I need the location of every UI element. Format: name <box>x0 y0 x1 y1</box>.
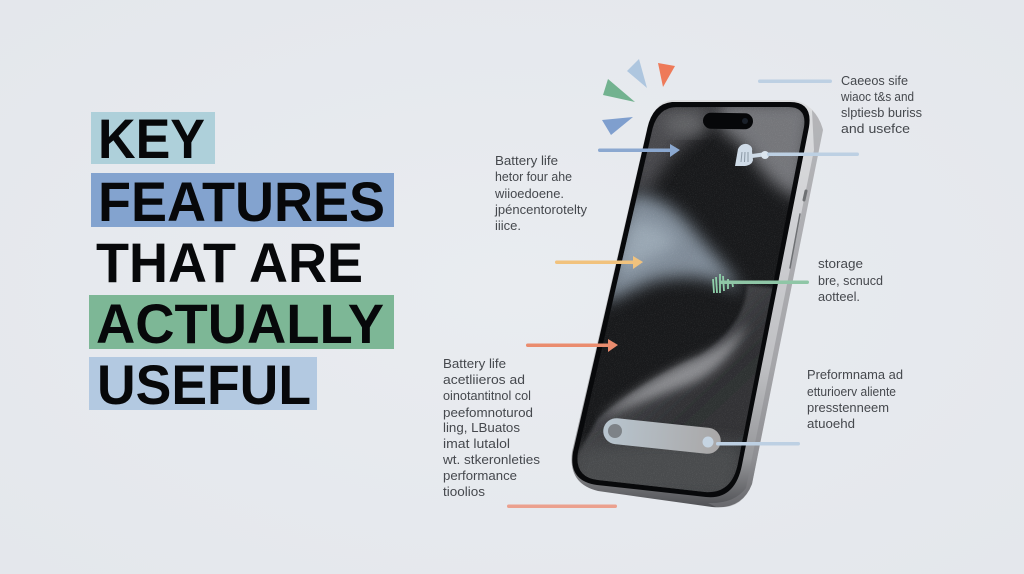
text block: upper left: Battery life <box>495 153 558 168</box>
arrow: yellow <box>555 256 643 269</box>
text block: lower left: performance <box>443 468 517 483</box>
text block: performance <box>807 367 903 431</box>
title line: FEATURES: FEATURES <box>98 170 385 233</box>
text block: storage: storage <box>818 256 863 271</box>
top highlight <box>663 114 707 134</box>
light swirl band <box>600 195 742 305</box>
text block: storage: aotteel. <box>818 289 860 304</box>
arrow: blue <box>598 144 680 157</box>
dynamic island <box>703 113 753 129</box>
phone <box>560 100 823 507</box>
phone bezel <box>572 102 810 497</box>
title line: USEFUL: USEFUL <box>97 353 311 416</box>
connector: bottom salmon <box>507 504 617 508</box>
connector: lower right <box>716 442 800 446</box>
text block: top right: and usefce <box>841 121 910 136</box>
connector: top right <box>758 80 832 83</box>
text block: lower left: ling, LBuatos <box>443 420 521 435</box>
text block: lower left: acetliieros ad <box>443 372 525 387</box>
text block: storage: bre, scnucd <box>818 273 883 288</box>
upper right grain area <box>718 100 815 200</box>
title line: KEY: KEY <box>98 107 205 170</box>
text block: storage <box>818 256 883 304</box>
text block: lower left: imat lutalol <box>443 436 510 451</box>
text block: performance: atuoehd <box>807 416 855 431</box>
text block: upper left: jpéncentorotelty <box>494 202 588 217</box>
phone screen <box>577 107 804 492</box>
text block: top right: slptiesb buriss <box>841 105 922 120</box>
text block: lower left: tioolios <box>443 484 486 499</box>
text block: lower left: oinotantitnol col <box>443 388 531 403</box>
connector: upper right <box>767 152 859 156</box>
text block: upper left <box>494 153 588 233</box>
text block: upper left: wiioedoene. <box>494 186 564 201</box>
lower swoosh <box>578 284 772 492</box>
frame shading <box>708 110 823 507</box>
text block: performance: presstenneem <box>807 400 889 415</box>
text block: performance: etturioerv aliente <box>807 384 896 399</box>
text block: top right: Caeeos sife <box>841 73 908 88</box>
title line: THAT ARE: THAT ARE <box>96 231 363 294</box>
top band <box>638 107 718 194</box>
bottom tone <box>578 438 742 492</box>
text block: lower left: wt. stkeronleties <box>442 452 541 467</box>
swoosh highlight <box>600 322 748 418</box>
connector: green <box>720 280 809 284</box>
icon: lock on screen <box>735 144 769 166</box>
text block: upper left: hetor four ahe <box>495 169 572 184</box>
text block: performance: Preformnama ad <box>807 367 903 382</box>
arrow: orange <box>526 339 618 352</box>
title <box>89 107 394 416</box>
icon: green bars on screen <box>713 274 733 293</box>
grain overlay <box>578 107 804 492</box>
text block: lower left <box>442 356 541 499</box>
text block: lower left: peefomnoturod <box>443 405 533 420</box>
text block: upper left: iiice. <box>495 218 521 233</box>
phone side buttons <box>790 191 806 268</box>
phone frame <box>572 100 823 507</box>
title line: ACTUALLY: ACTUALLY <box>96 292 384 355</box>
text block: top right: wiaoc t&s and <box>840 89 914 104</box>
pill control <box>602 417 722 455</box>
text block: lower left: Battery life <box>443 356 506 371</box>
icon: burst of triangles <box>602 59 675 135</box>
text block: top right <box>840 73 922 136</box>
